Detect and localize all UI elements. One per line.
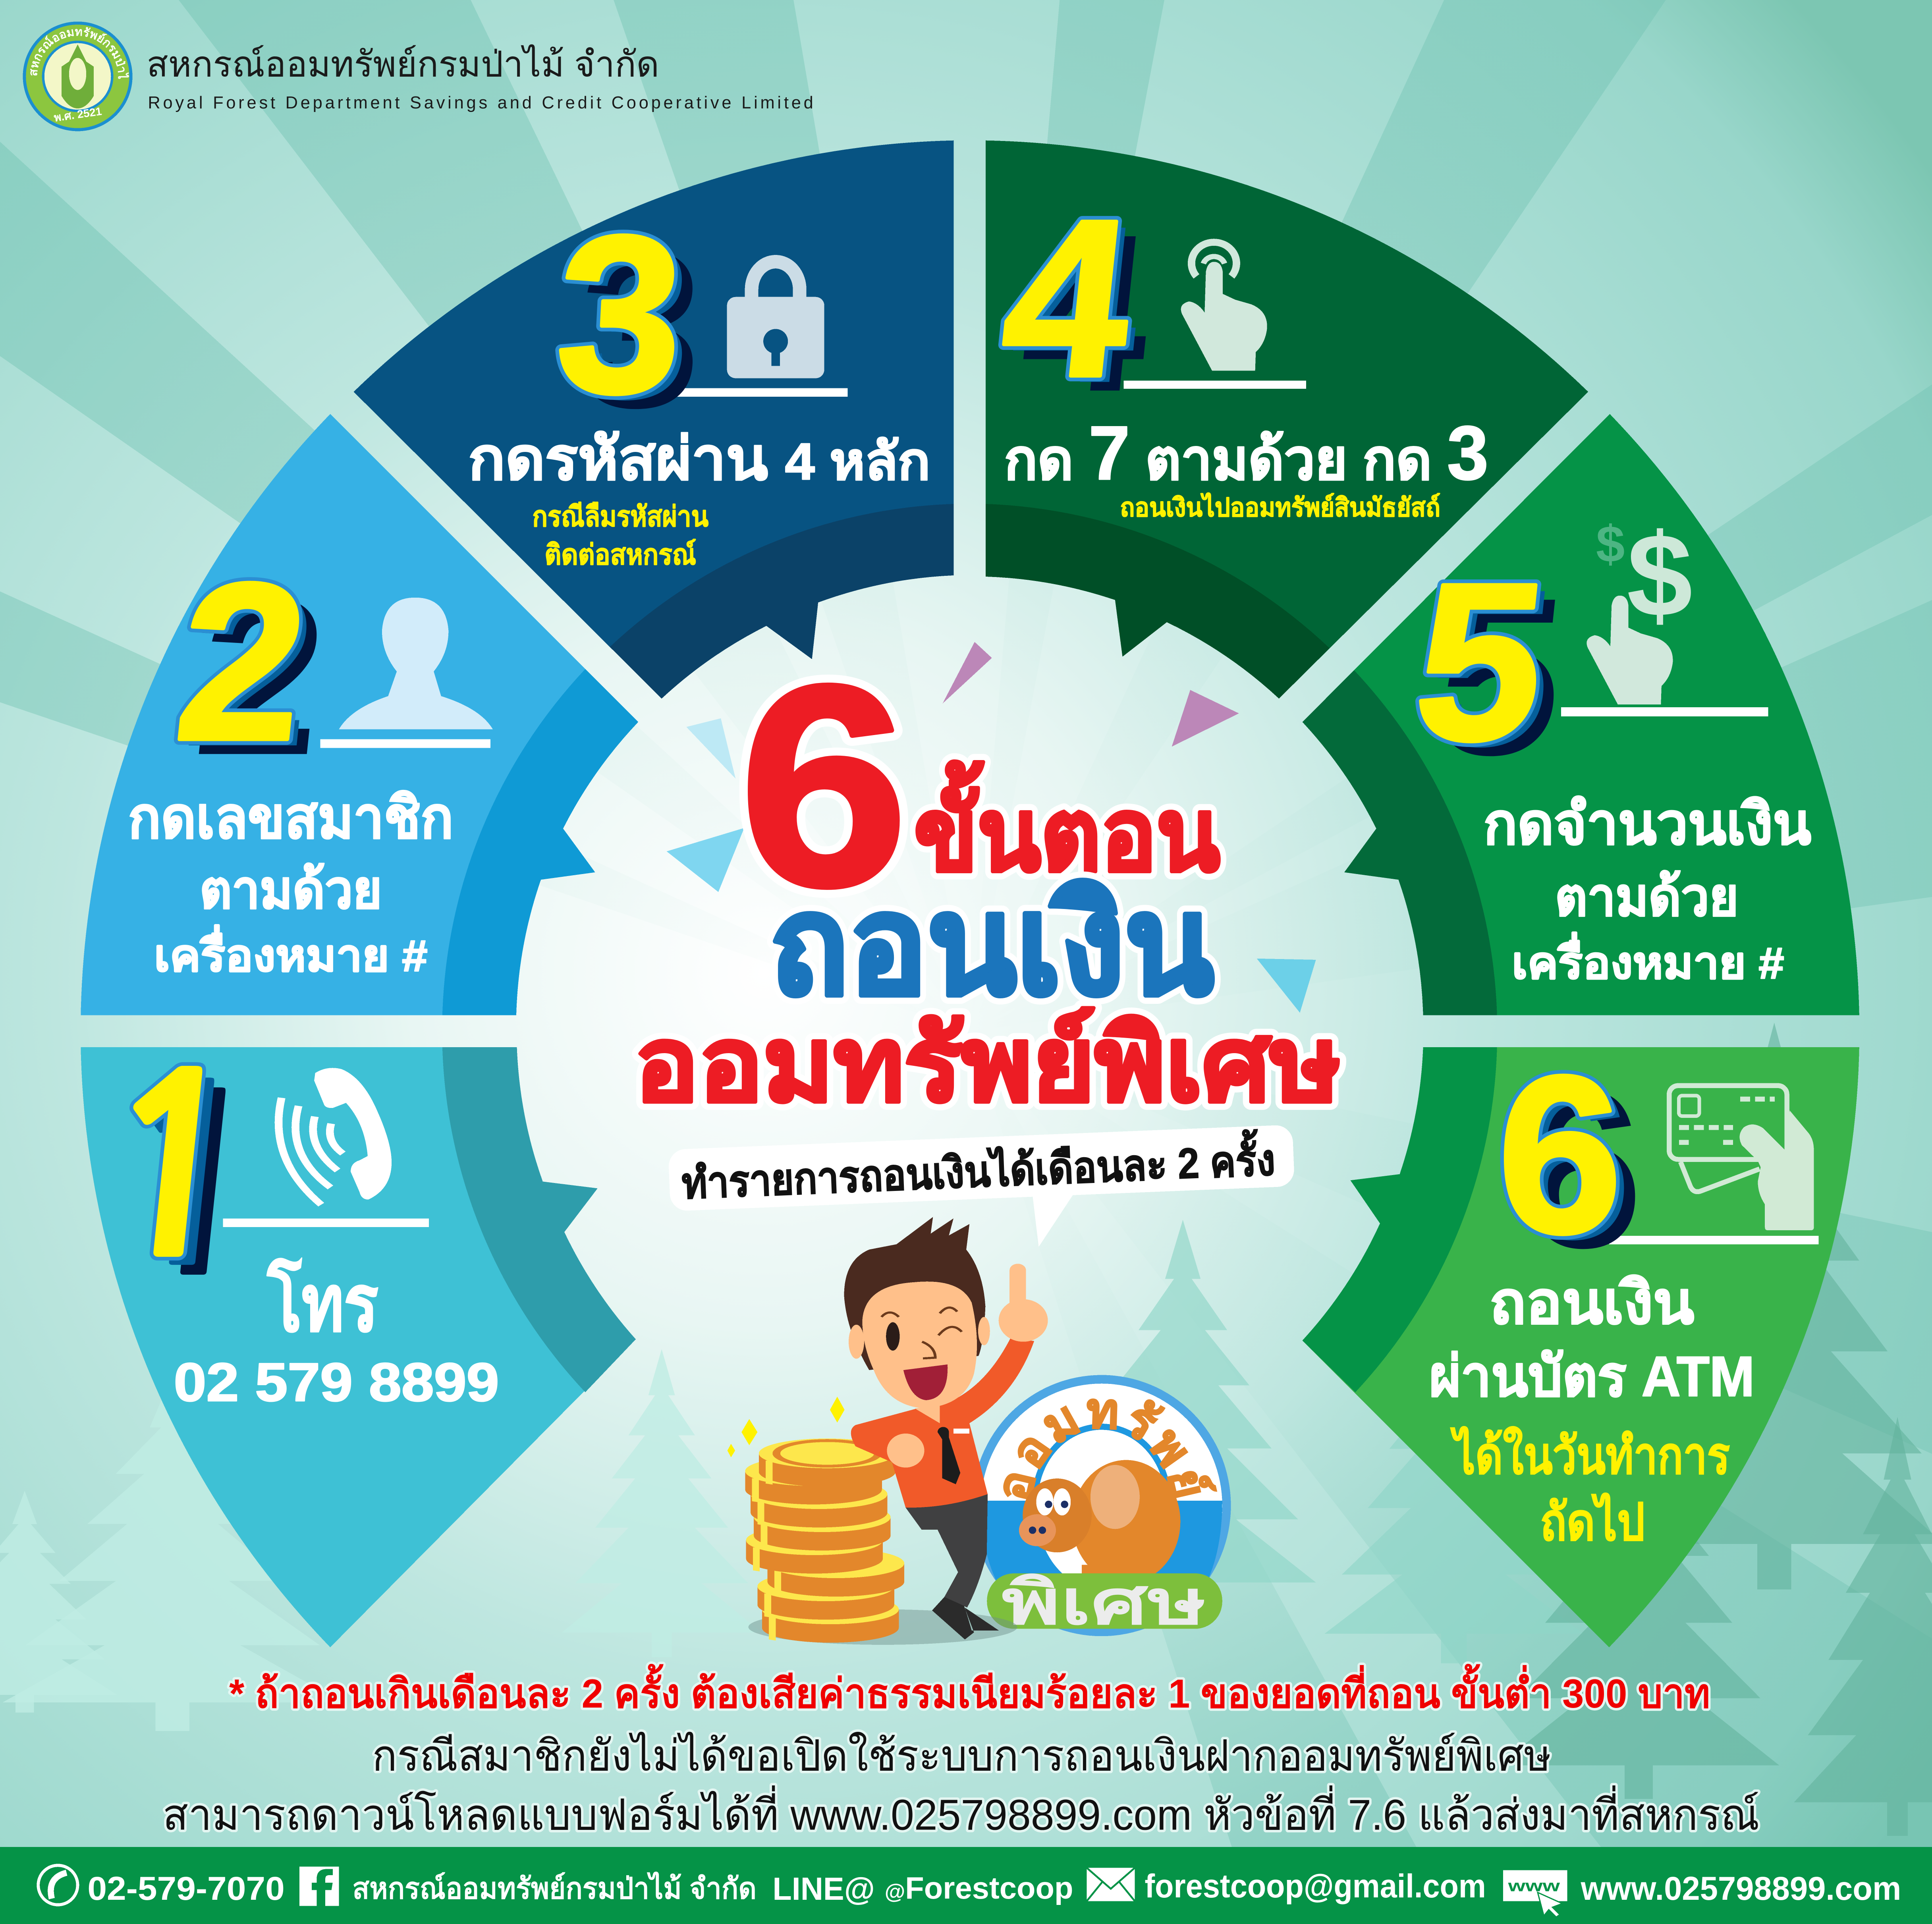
- icon: padlock: [727, 262, 824, 378]
- panel: step 5 amount: [1303, 414, 1859, 1015]
- number 3: 3: [551, 189, 689, 440]
- shirt and raised arm: [851, 1338, 1034, 1508]
- badge word: ออมทรัพย์: [986, 1384, 1218, 1506]
- footer contact bar: LINE@: [772, 1871, 875, 1907]
- panel: step 5 amount: เครื่องหมาย #: [1512, 932, 1784, 988]
- registration instructions: กรณีสมาชิกยังไม่ได้ขอเปิดใช้ระบบการถอนเงินฝากออมทรัพย์พิเศษ: [372, 1732, 1551, 1780]
- panel: step 1 call: [81, 1047, 636, 1647]
- icon: dollar signs and hand: [1587, 509, 1693, 704]
- icon: www cursor: www: [1507, 1876, 1560, 1895]
- head: [844, 1217, 985, 1370]
- panel: step 1 call: 02 579 8899: [174, 1352, 499, 1413]
- fist and pointing hand: [887, 1434, 925, 1468]
- number 3: 3: [571, 203, 709, 454]
- header: organisation name: Royal Forest Department Savings and Credit Cooperative Limited: [148, 93, 813, 112]
- step 2 text: กดเลขสมาชิก: [128, 785, 454, 850]
- number 4: 4: [1011, 187, 1164, 438]
- number 3: 3: [561, 195, 699, 446]
- number 5: 5: [1424, 551, 1575, 801]
- footer contact bar: [0, 1847, 1932, 1924]
- title: ขั้นตอน: [914, 761, 1220, 891]
- panel: step 4 press 7 then 3: [986, 141, 1588, 699]
- step 3 text: กดรหัสผ่าน 4 หลัก: [468, 426, 930, 492]
- registration instructions: [163, 1732, 1760, 1839]
- number 4: 4: [1002, 179, 1154, 429]
- panel: step 2 member number: เครื่องหมาย #: [154, 924, 428, 980]
- title: 6: [739, 626, 908, 946]
- title: [635, 626, 1341, 1123]
- number 2: 2: [167, 536, 318, 787]
- number 1: 1: [98, 1057, 273, 1301]
- number 5: 5: [1405, 536, 1556, 787]
- callout: two withdrawals per month: [668, 1125, 1295, 1247]
- coin stack: [745, 1438, 904, 1643]
- number 6: 6: [1498, 1029, 1622, 1280]
- number 5: 5: [1414, 542, 1565, 793]
- title: ขั้นตอน: [914, 761, 1220, 891]
- number 6: 6: [1498, 1029, 1622, 1280]
- title: 6: [739, 626, 908, 946]
- number 5: 5: [1405, 536, 1556, 787]
- footer contact bar: www.025798899.com: [1581, 1870, 1901, 1907]
- icon: ATM card in hand: [1669, 1086, 1814, 1230]
- title: ออมทรัพย์พิเศษ: [635, 1006, 1341, 1123]
- logo: cooperative seal: พ.ศ. 2521: [53, 105, 102, 124]
- title: ถอนเงิน: [770, 868, 1214, 1023]
- icon: phone circle: [38, 1865, 78, 1905]
- number 6: 6: [1507, 1035, 1632, 1286]
- step 5 text: กดจำนวนเงิน: [1484, 791, 1811, 856]
- number 1: 1: [84, 1047, 259, 1291]
- header: organisation name: สหกรณ์ออมทรัพย์กรมป่าไม้ จำกัด: [147, 44, 659, 84]
- tie: [938, 1427, 960, 1484]
- special pill label: [987, 1573, 1222, 1629]
- footer contact bar: สหกรณ์ออมทรัพย์กรมป่าไม้ จำกัด: [352, 1871, 757, 1905]
- icon: touch hand: [1181, 242, 1267, 371]
- panel: step 6 ATM: ได้ในวันทำการ: [1450, 1426, 1730, 1485]
- icon: dollar signs and hand: $: [1627, 509, 1693, 641]
- step 4 text: กด 7 ตามด้วย กด 3: [1004, 410, 1488, 496]
- panel: step 6 ATM: [1303, 1029, 1859, 1647]
- logo: cooperative seal: [0, 0, 133, 131]
- illustration: savings badge: [972, 1375, 1231, 1637]
- panel: step 3 password: กรณีลืมรหัสผ่าน: [532, 501, 708, 533]
- step 6 text: ถอนเงิน: [1490, 1270, 1694, 1336]
- title: ออมทรัพย์พิเศษ: [635, 1006, 1341, 1123]
- icon: www cursor: [1503, 1870, 1567, 1917]
- header: organisation name: [147, 44, 813, 112]
- icon: facebook: [299, 1866, 339, 1906]
- registration instructions: สามารถดาวน์โหลดแบบฟอร์มได้ที่ www.025798899.com หัวข้อที่ 7.6 แล้วส่งมาที่สหกรณ์: [163, 1785, 1760, 1839]
- decorative triangles: [667, 642, 1316, 1013]
- callout: two withdrawals per month: ทำรายการถอนเงินได้เดือนละ 2 ครั้ง: [681, 1128, 1276, 1208]
- piggy bank: [1019, 1460, 1180, 1587]
- number 2: 2: [176, 542, 327, 793]
- number 1: 1: [109, 1067, 284, 1311]
- number 6: 6: [1519, 1044, 1643, 1295]
- icon: person: [339, 598, 493, 729]
- panel: step 3 password: ติดต่อสหกรณ์: [544, 539, 696, 571]
- panel: step 2 member number: [81, 414, 638, 1015]
- fee warning note: * ถ้าถอนเกินเดือนละ 2 ครั้ง ต้องเสียค่าธรรมเนียมร้อยละ 1 ของยอดที่ถอน ขั้นต่ำ 300 บาท: [229, 1664, 1710, 1716]
- number 1: 1: [84, 1047, 259, 1291]
- legs and shoes: [905, 1494, 988, 1608]
- footer contact bar: @Forestcoop: [885, 1871, 1073, 1905]
- footer contact bar: 02-579-7070: [87, 1870, 285, 1907]
- icon: envelope: [1087, 1868, 1135, 1901]
- number 3: 3: [551, 189, 689, 440]
- number 4: 4: [992, 173, 1145, 423]
- panel: step 4 press 7 then 3: ถอนเงินไปออมทรัพย์สินมัธยัสถ์: [1120, 492, 1440, 522]
- panel: step 2 member number: ตามด้วย: [200, 861, 382, 920]
- shadow: [748, 1609, 1017, 1645]
- step 1 text: โทร: [267, 1258, 378, 1348]
- icon: dollar signs and hand: $: [1596, 515, 1625, 573]
- illustration: man leaning on coin stack: [728, 1217, 1048, 1645]
- footer contact bar: forestcoop@gmail.com: [1145, 1867, 1486, 1905]
- panel: step 6 ATM: ผ่านบัตร ATM: [1429, 1345, 1754, 1408]
- icon: phone: [279, 1068, 392, 1205]
- panel: step 5 amount: ตามด้วย: [1555, 868, 1739, 927]
- number 4: 4: [992, 173, 1145, 423]
- title: ถอนเงิน: [770, 868, 1214, 1023]
- illustration: savings badge: พิเศษ: [1002, 1568, 1206, 1637]
- panel: step 6 ATM: ถัดไป: [1540, 1492, 1645, 1551]
- panel: step 3 password: [354, 141, 953, 699]
- number 2: 2: [186, 551, 337, 801]
- sparkles: [728, 1397, 845, 1457]
- number 2: 2: [167, 536, 318, 787]
